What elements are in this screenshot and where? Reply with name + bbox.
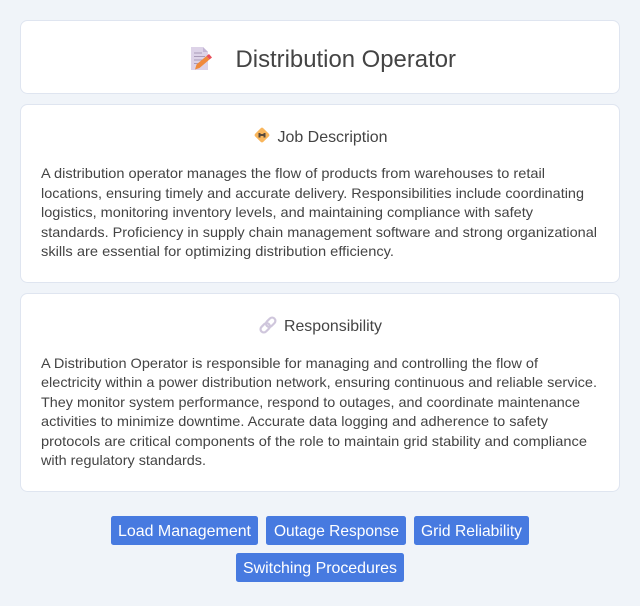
text block: job description: logistics, monitoring inventory levels, and maintaining compliance with safety — [41, 204, 533, 220]
text block: responsibility: electricity within a power distribution network, ensuring continuous and reliable service. — [41, 374, 597, 390]
text block: job description: A distribution operator manages the flow of products from warehouses to retail — [41, 165, 545, 181]
tag: grid reliability: Grid Reliability — [421, 523, 522, 540]
text block: responsibility: activities to minimize downtime. Accurate data logging and adherence to safety — [41, 413, 548, 429]
text block: responsibility: with regulatory standards. — [40, 452, 206, 468]
panel: job description — [20, 104, 620, 282]
icon: link — [259, 316, 277, 334]
text block: job description — [41, 165, 597, 259]
icon: orange diamond — [254, 127, 270, 143]
text block: responsibility — [40, 355, 597, 468]
tag: load management — [111, 516, 258, 545]
text block: responsibility: They monitor system performance, respond to outages, and coordinate maintenance — [41, 394, 580, 410]
tag: switching procedures — [236, 553, 404, 582]
text block: job description: standards. Proficiency in supply chain management software and strong organizational — [41, 224, 597, 240]
text block: job description: locations, ensuring timely and accurate delivery. Responsibilities include coordinating — [41, 185, 584, 201]
icon: memo with pencil — [191, 47, 212, 70]
tag: grid reliability — [414, 516, 529, 545]
heading: job description: Job Description — [278, 129, 388, 146]
tag: outage response: Outage Response — [274, 523, 399, 540]
tag group — [111, 516, 529, 582]
text block: job description: skills are essential for optimizing distribution efficiency. — [41, 243, 394, 259]
tag: outage response — [266, 516, 406, 545]
heading: responsibility: Responsibility — [284, 318, 382, 335]
tag: load management: Load Management — [118, 523, 252, 540]
text block: responsibility: protocols are critical components of the role to maintain grid stability and compliance — [41, 433, 587, 449]
panel: responsibility — [20, 294, 620, 492]
panel: title card — [20, 20, 620, 94]
tag: switching procedures: Switching Procedures — [243, 560, 397, 577]
title: Distribution Operator — [236, 46, 456, 73]
text block: responsibility: A Distribution Operator is responsible for managing and controlling the flow of — [41, 355, 538, 371]
